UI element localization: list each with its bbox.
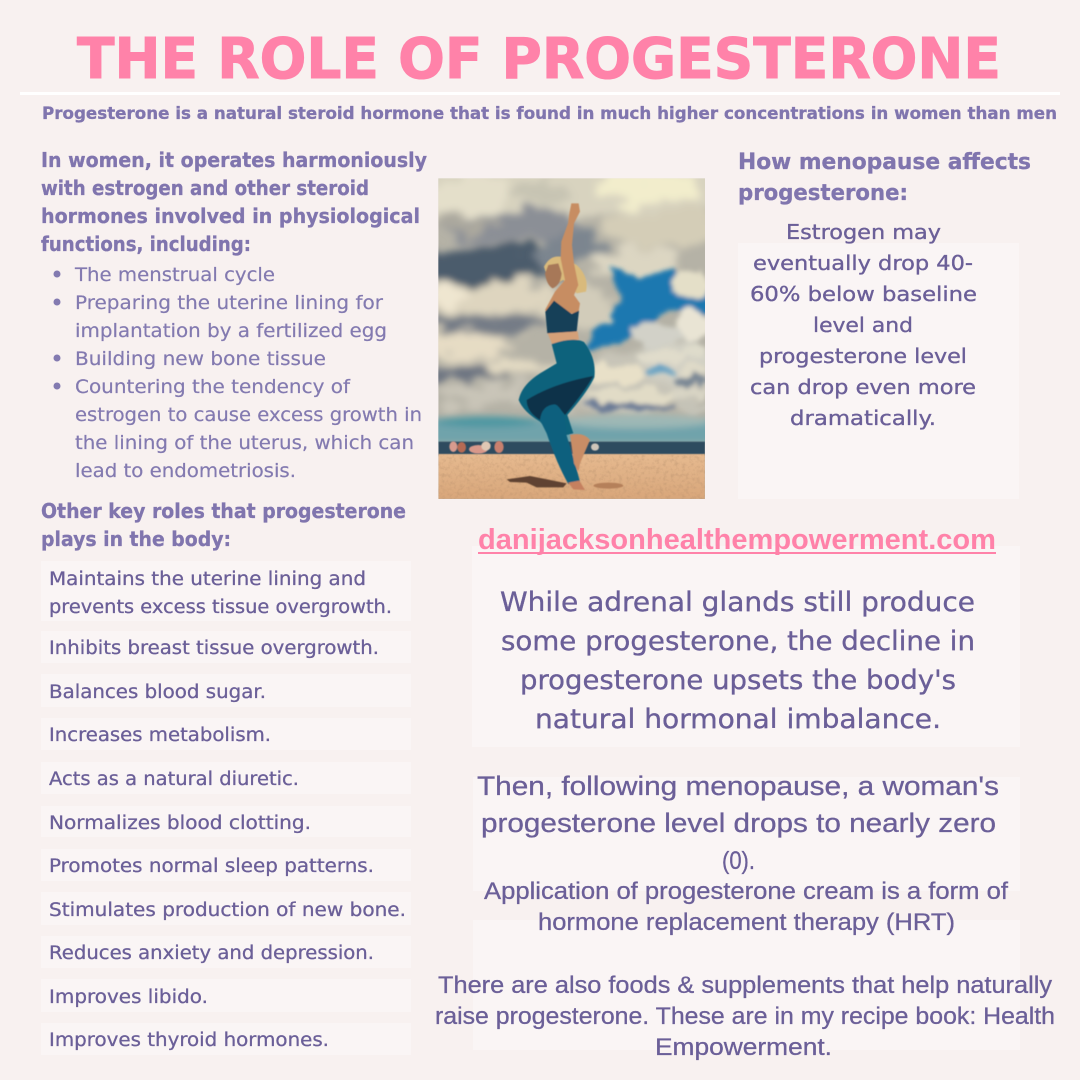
role: blood sugar xyxy=(41,674,411,707)
bullet list: physiological functions xyxy=(54,264,422,482)
panel: progesterone cream and foods: Empowerment. xyxy=(655,1034,832,1061)
role: blood clotting xyxy=(41,806,411,837)
role: blood sugar: Balances blood sugar. xyxy=(49,682,266,703)
role: libido: Improves libido. xyxy=(49,987,208,1008)
bullet list: physiological functions: estrogen to cause excess growth in xyxy=(75,404,422,426)
panel: estrogen drop: Estrogen may xyxy=(786,220,941,244)
heading: in women: functions, including: xyxy=(41,232,251,256)
website link: danijacksonhealthempowerment.com xyxy=(478,524,996,556)
panel: adrenal glands: natural hormonal imbalance. xyxy=(535,704,941,735)
panel: adrenal glands xyxy=(472,546,1020,747)
role: anxiety xyxy=(41,936,411,968)
role: thyroid xyxy=(41,1023,411,1055)
role: diuretic: Acts as a natural diuretic. xyxy=(49,769,299,790)
bullet list: physiological functions: Countering the tendency of xyxy=(75,376,351,398)
panel: progesterone cream and foods: There are also foods & supplements that help naturally xyxy=(438,972,1052,999)
role: breast tissue xyxy=(41,631,411,663)
heading: other key roles xyxy=(41,499,406,551)
heading: how menopause affects progesterone: How menopause affects xyxy=(738,150,1031,175)
title: THE ROLE OF PROGESTERONE xyxy=(77,27,1001,92)
role: metabolism: Increases metabolism. xyxy=(49,725,271,746)
heading: how menopause affects progesterone: progesterone: xyxy=(738,181,908,206)
role: anxiety: Reduces anxiety and depression. xyxy=(49,943,374,964)
role: diuretic xyxy=(41,762,411,794)
role: thyroid: Improves thyroid hormones. xyxy=(49,1030,329,1051)
heading: in women: hormones involved in physiological xyxy=(41,204,420,228)
role: metabolism xyxy=(41,718,411,750)
heading: in women xyxy=(41,148,427,256)
panel: progesterone cream and foods: Application of progesterone cream is a form of xyxy=(484,878,1008,905)
heading: other key roles: plays in the body: xyxy=(41,527,231,551)
panel: estrogen drop: progesterone level xyxy=(759,344,967,368)
bullet list: physiological functions: Preparing the uterine lining for xyxy=(75,292,383,314)
role: new bone: Stimulates production of new bone. xyxy=(49,900,406,921)
heading: in women: with estrogen and other steroid xyxy=(41,176,369,200)
panel: estrogen drop xyxy=(738,220,1019,499)
panel: estrogen drop: 60% below baseline xyxy=(750,282,977,306)
heading: other key roles: Other key roles that progesterone xyxy=(41,499,406,523)
role: uterine lining: prevents excess tissue overgrowth. xyxy=(49,597,392,618)
panel: estrogen drop: eventually drop 40- xyxy=(753,251,973,275)
photo: woman in yoga pose on beach xyxy=(438,178,705,499)
role: uterine lining: Maintains the uterine lining and xyxy=(49,569,366,590)
panel: adrenal glands: progesterone upsets the body's xyxy=(520,665,956,696)
panel: estrogen drop: level and xyxy=(813,313,913,337)
panel: following menopause: (0). xyxy=(722,847,755,875)
panel: following menopause: progesterone level drops to nearly zero xyxy=(481,808,996,838)
panel: estrogen drop: dramatically. xyxy=(790,406,936,430)
role: libido xyxy=(41,979,411,1012)
bullet list: physiological functions: implantation by a fertilized egg xyxy=(75,320,387,342)
role: sleep: Promotes normal sleep patterns. xyxy=(49,856,374,877)
panel: adrenal glands: While adrenal glands still produce xyxy=(500,587,975,618)
subtitle: Progesterone is a natural steroid hormone that is found in much higher concentrations in women than men xyxy=(42,104,1057,123)
role: blood clotting: Normalizes blood clotting. xyxy=(49,813,311,834)
panel: following menopause: Then, following menopause, a woman's xyxy=(477,771,999,801)
role: sleep xyxy=(41,849,411,881)
bullet list: physiological functions: lead to endometriosis. xyxy=(75,460,296,482)
panel: following menopause xyxy=(473,771,1020,891)
role: new bone xyxy=(41,892,411,925)
panel: key roles list xyxy=(41,561,411,1055)
panel: progesterone cream and foods: hormone replacement therapy (HRT) xyxy=(538,909,955,936)
heading: how menopause affects progesterone xyxy=(738,150,1031,206)
panel: progesterone cream and foods: raise progesterone. These are in my recipe book: Health xyxy=(435,1003,1055,1030)
heading: in women: In women, it operates harmoniously xyxy=(41,148,427,172)
bullet list: physiological functions: The menstrual cycle xyxy=(74,264,275,286)
panel: adrenal glands: some progesterone, the decline in xyxy=(501,626,975,657)
bullet list: physiological functions: Building new bone tissue xyxy=(75,348,326,370)
role: uterine lining xyxy=(41,561,411,621)
role: breast tissue: Inhibits breast tissue overgrowth. xyxy=(49,638,379,659)
bullet list: physiological functions: the lining of the uterus, which can xyxy=(75,432,414,454)
panel: progesterone cream and foods xyxy=(435,878,1055,1061)
woman figure xyxy=(519,203,595,490)
panel: estrogen drop: can drop even more xyxy=(750,375,976,399)
